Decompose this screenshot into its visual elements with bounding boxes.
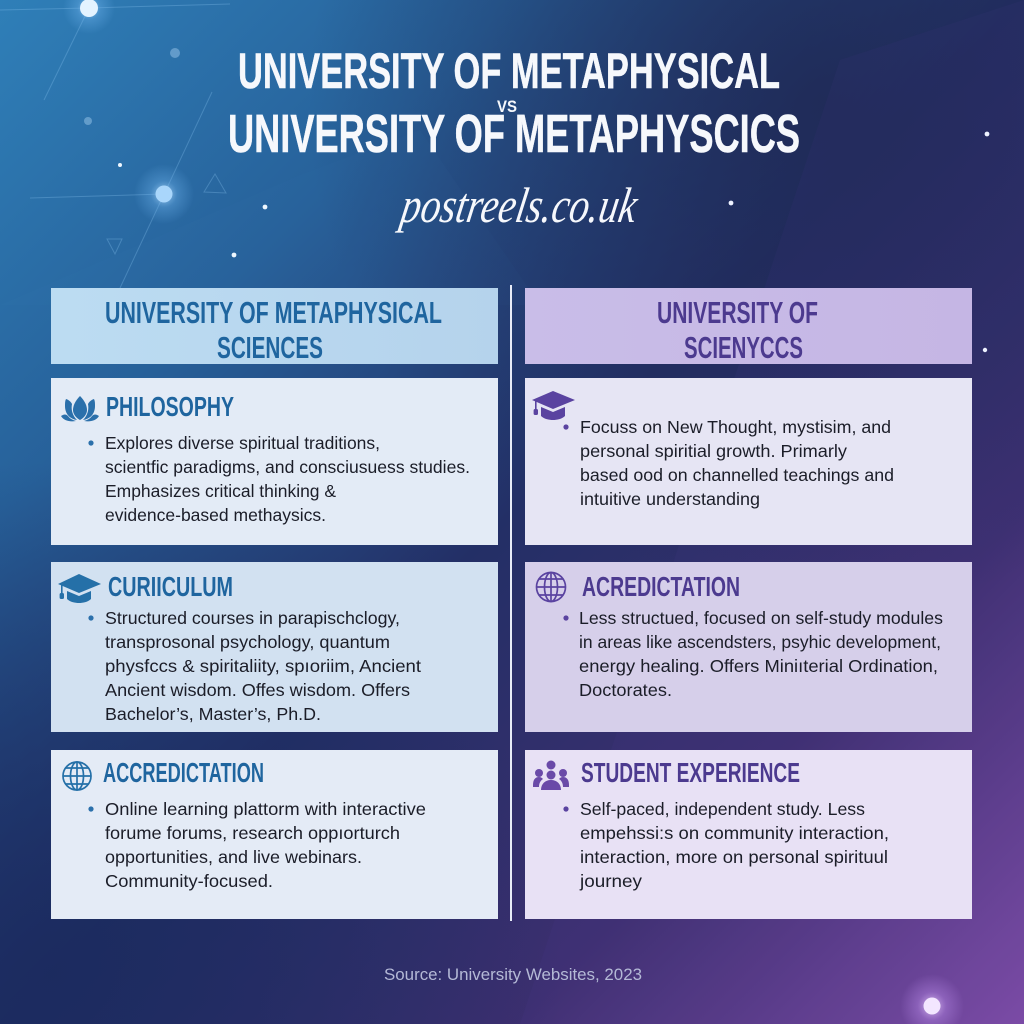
text block: curriculum: Bachelor’s, Master’s, Ph.D. [105, 704, 321, 724]
title: UNIVERSITY OF METAPHYSICAL [238, 43, 780, 99]
icon: lotus [61, 396, 99, 421]
panel: right first card [525, 378, 972, 545]
panel: student experience [525, 750, 972, 919]
text block: new thought [563, 417, 894, 509]
icon: graduation cap [532, 391, 575, 420]
panel: left column header [51, 288, 498, 365]
source note: Source: University Websites, 2023 [384, 965, 642, 984]
heading: student experience: STUDENT EXPERIENCE [581, 757, 800, 788]
text block: self paced: empehssi:s on community interaction, [580, 823, 889, 843]
icon: people [533, 760, 569, 790]
text block: online learning: opportunities, and live webinars. [105, 847, 362, 867]
text block: self paced [563, 799, 889, 891]
text block: self study: in areas like ascendsters, psyhic development, [579, 632, 941, 652]
text block: philosophy: scientfic paradigms, and consciusuess studies. [105, 457, 470, 477]
text block: self study: energy healing. Offers Miniıterial Ordination, [579, 656, 938, 676]
panel: right column header [525, 288, 972, 365]
text block: online learning [88, 799, 426, 891]
text block: new thought: personal spiritial growth. Primarly [580, 441, 847, 461]
website script line: postreels.co.uk [395, 177, 643, 233]
text block: philosophy: Emphasizes critical thinking & [105, 481, 336, 501]
text block: curriculum: physfccs & spiritaliity, spıoriim, Ancient [105, 656, 421, 676]
panel: left column header: SCIENCES [217, 330, 323, 365]
text block: self study: Doctorates. [579, 680, 672, 700]
heading: curriculum: CURIICULUM [108, 571, 233, 602]
heading: acredictation: ACREDICTATION [582, 571, 740, 602]
heading: philosophy: PHILOSOPHY [106, 391, 234, 422]
text block: philosophy: Explores diverse spiritual traditions, [105, 433, 380, 453]
icon: globe [536, 572, 566, 602]
panel: right column header: UNIVERSITY OF [657, 295, 818, 330]
panel: left accreditation [51, 750, 498, 919]
text block: curriculum: Ancient wisdom. Offes wisdom. Offers [105, 680, 410, 700]
text block: new thought: Focuss on New Thought, mystisim, and [580, 417, 891, 437]
text block: online learning: Online learning plattorm with interactive [105, 799, 426, 819]
title [228, 43, 800, 164]
text block: curriculum [88, 608, 421, 724]
icon: graduation cap [58, 574, 101, 603]
panel: philosophy [51, 378, 498, 545]
text block: self study: Less structued, focused on self-study modules [579, 608, 943, 628]
panel: curriculum [51, 562, 498, 732]
text block: new thought: intuitive understanding [580, 489, 760, 509]
panel: right column header: SCIENYCCS [684, 330, 803, 365]
panel: left column header: UNIVERSITY OF METAPHYSICAL [105, 295, 442, 330]
title: VS [497, 97, 517, 116]
centre divider [510, 285, 512, 921]
text block: philosophy: evidence-based methaysics. [105, 505, 326, 525]
icon: globe [63, 762, 91, 790]
text block: online learning: forume forums, research oppıorturch [105, 823, 400, 843]
text block: self paced: Self-paced, independent study. Less [580, 799, 865, 819]
text block: online learning: Community-focused. [105, 871, 273, 891]
heading: accredictation: ACCREDICTATION [103, 757, 264, 788]
text block: self paced: interaction, more on personal spirituul [580, 847, 888, 867]
text block: self paced: journey [579, 871, 642, 891]
text block: curriculum: transprosonal psychology, quantum [105, 632, 390, 652]
text block: curriculum: Structured courses in parapischclogy, [105, 608, 400, 628]
text block: new thought: based ood on channelled teachings and [580, 465, 894, 485]
text block: philosophy [88, 433, 470, 525]
panel: right accreditation [525, 562, 972, 732]
text block: self study [563, 608, 943, 700]
